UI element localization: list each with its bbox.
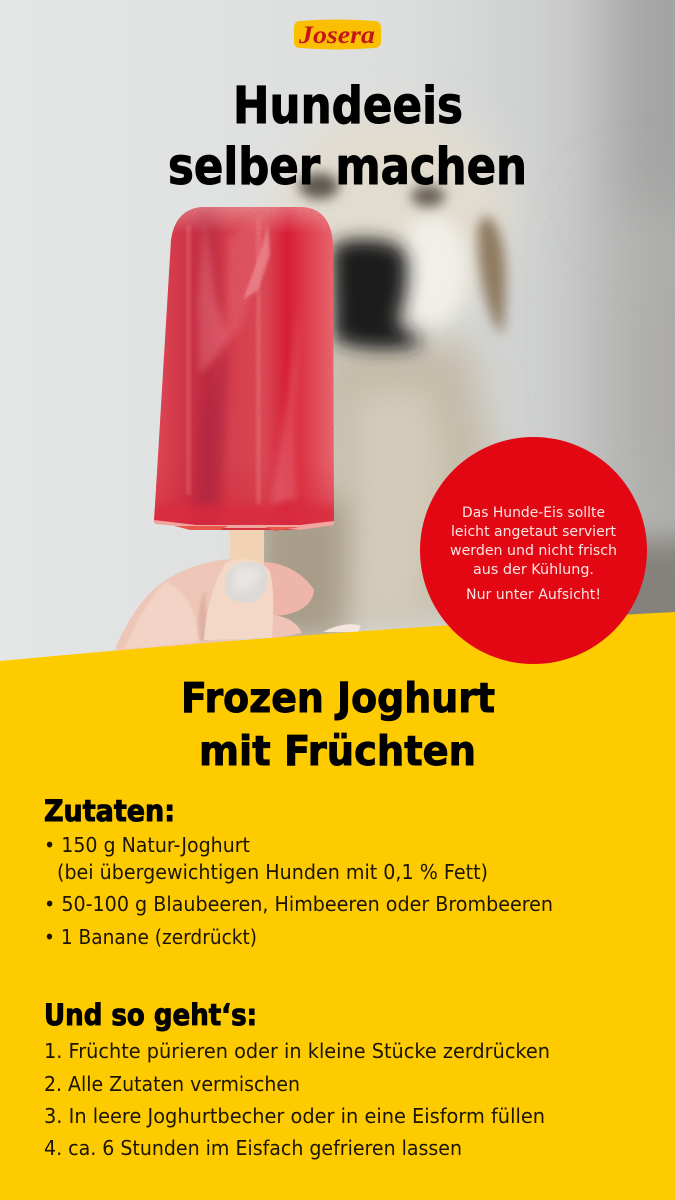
thumb (204, 559, 273, 640)
instructions (44, 998, 550, 1160)
title: selber machen (168, 138, 527, 197)
yellow recipe panel (0, 612, 675, 1200)
silver nail (225, 562, 267, 602)
ingredients: (bei übergewichtigen Hunden mit 0,1 % Fett) (57, 860, 488, 884)
callout: red circle: werden und nicht frisch (450, 543, 617, 559)
ingredients: • 150 g Natur-Joghurt (44, 833, 250, 857)
photo: blurred dog background (0, 0, 675, 670)
ingredients: • 50-100 g Blaubeeren, Himbeeren oder Brombeeren (44, 892, 553, 916)
instructions: 4. ca. 6 Stunden im Eisfach gefrieren lassen (44, 1136, 462, 1160)
callout: red circle: aus der Kühlung. (473, 562, 594, 578)
recipe heading: Frozen Joghurt (181, 674, 495, 722)
ingredients (44, 794, 553, 949)
title: Hundeeis (233, 77, 463, 136)
instructions: 3. In leere Joghurtbecher oder in eine Eisform füllen (44, 1104, 545, 1128)
callout: red circle: leicht angetaut serviert (451, 524, 616, 540)
popsicle (150, 200, 340, 535)
dog ear (478, 215, 506, 335)
title (168, 77, 527, 197)
logo: Josera: Josera (298, 22, 375, 49)
dog body (331, 326, 506, 632)
hand holding the stick (115, 522, 361, 650)
dog eyes (299, 173, 339, 199)
instructions: 1. Früchte pürieren oder in kleine Stücke zerdrücken (44, 1039, 550, 1063)
ingredients: Zutaten: (44, 794, 175, 828)
dog head (276, 114, 508, 264)
callout: red circle (420, 437, 647, 664)
popsicle stick (230, 522, 264, 570)
callout: red circle: Nur unter Aufsicht! (466, 587, 601, 603)
recipe heading (181, 674, 495, 775)
dog nose (332, 239, 421, 349)
instructions: Und so geht‘s: (44, 998, 257, 1032)
ingredients: • 1 Banane (zerdrückt) (44, 925, 257, 949)
instructions: 2. Alle Zutaten vermischen (44, 1072, 300, 1096)
recipe heading: mit Früchten (199, 727, 476, 775)
callout: red circle: Das Hunde-Eis sollte (462, 505, 605, 521)
